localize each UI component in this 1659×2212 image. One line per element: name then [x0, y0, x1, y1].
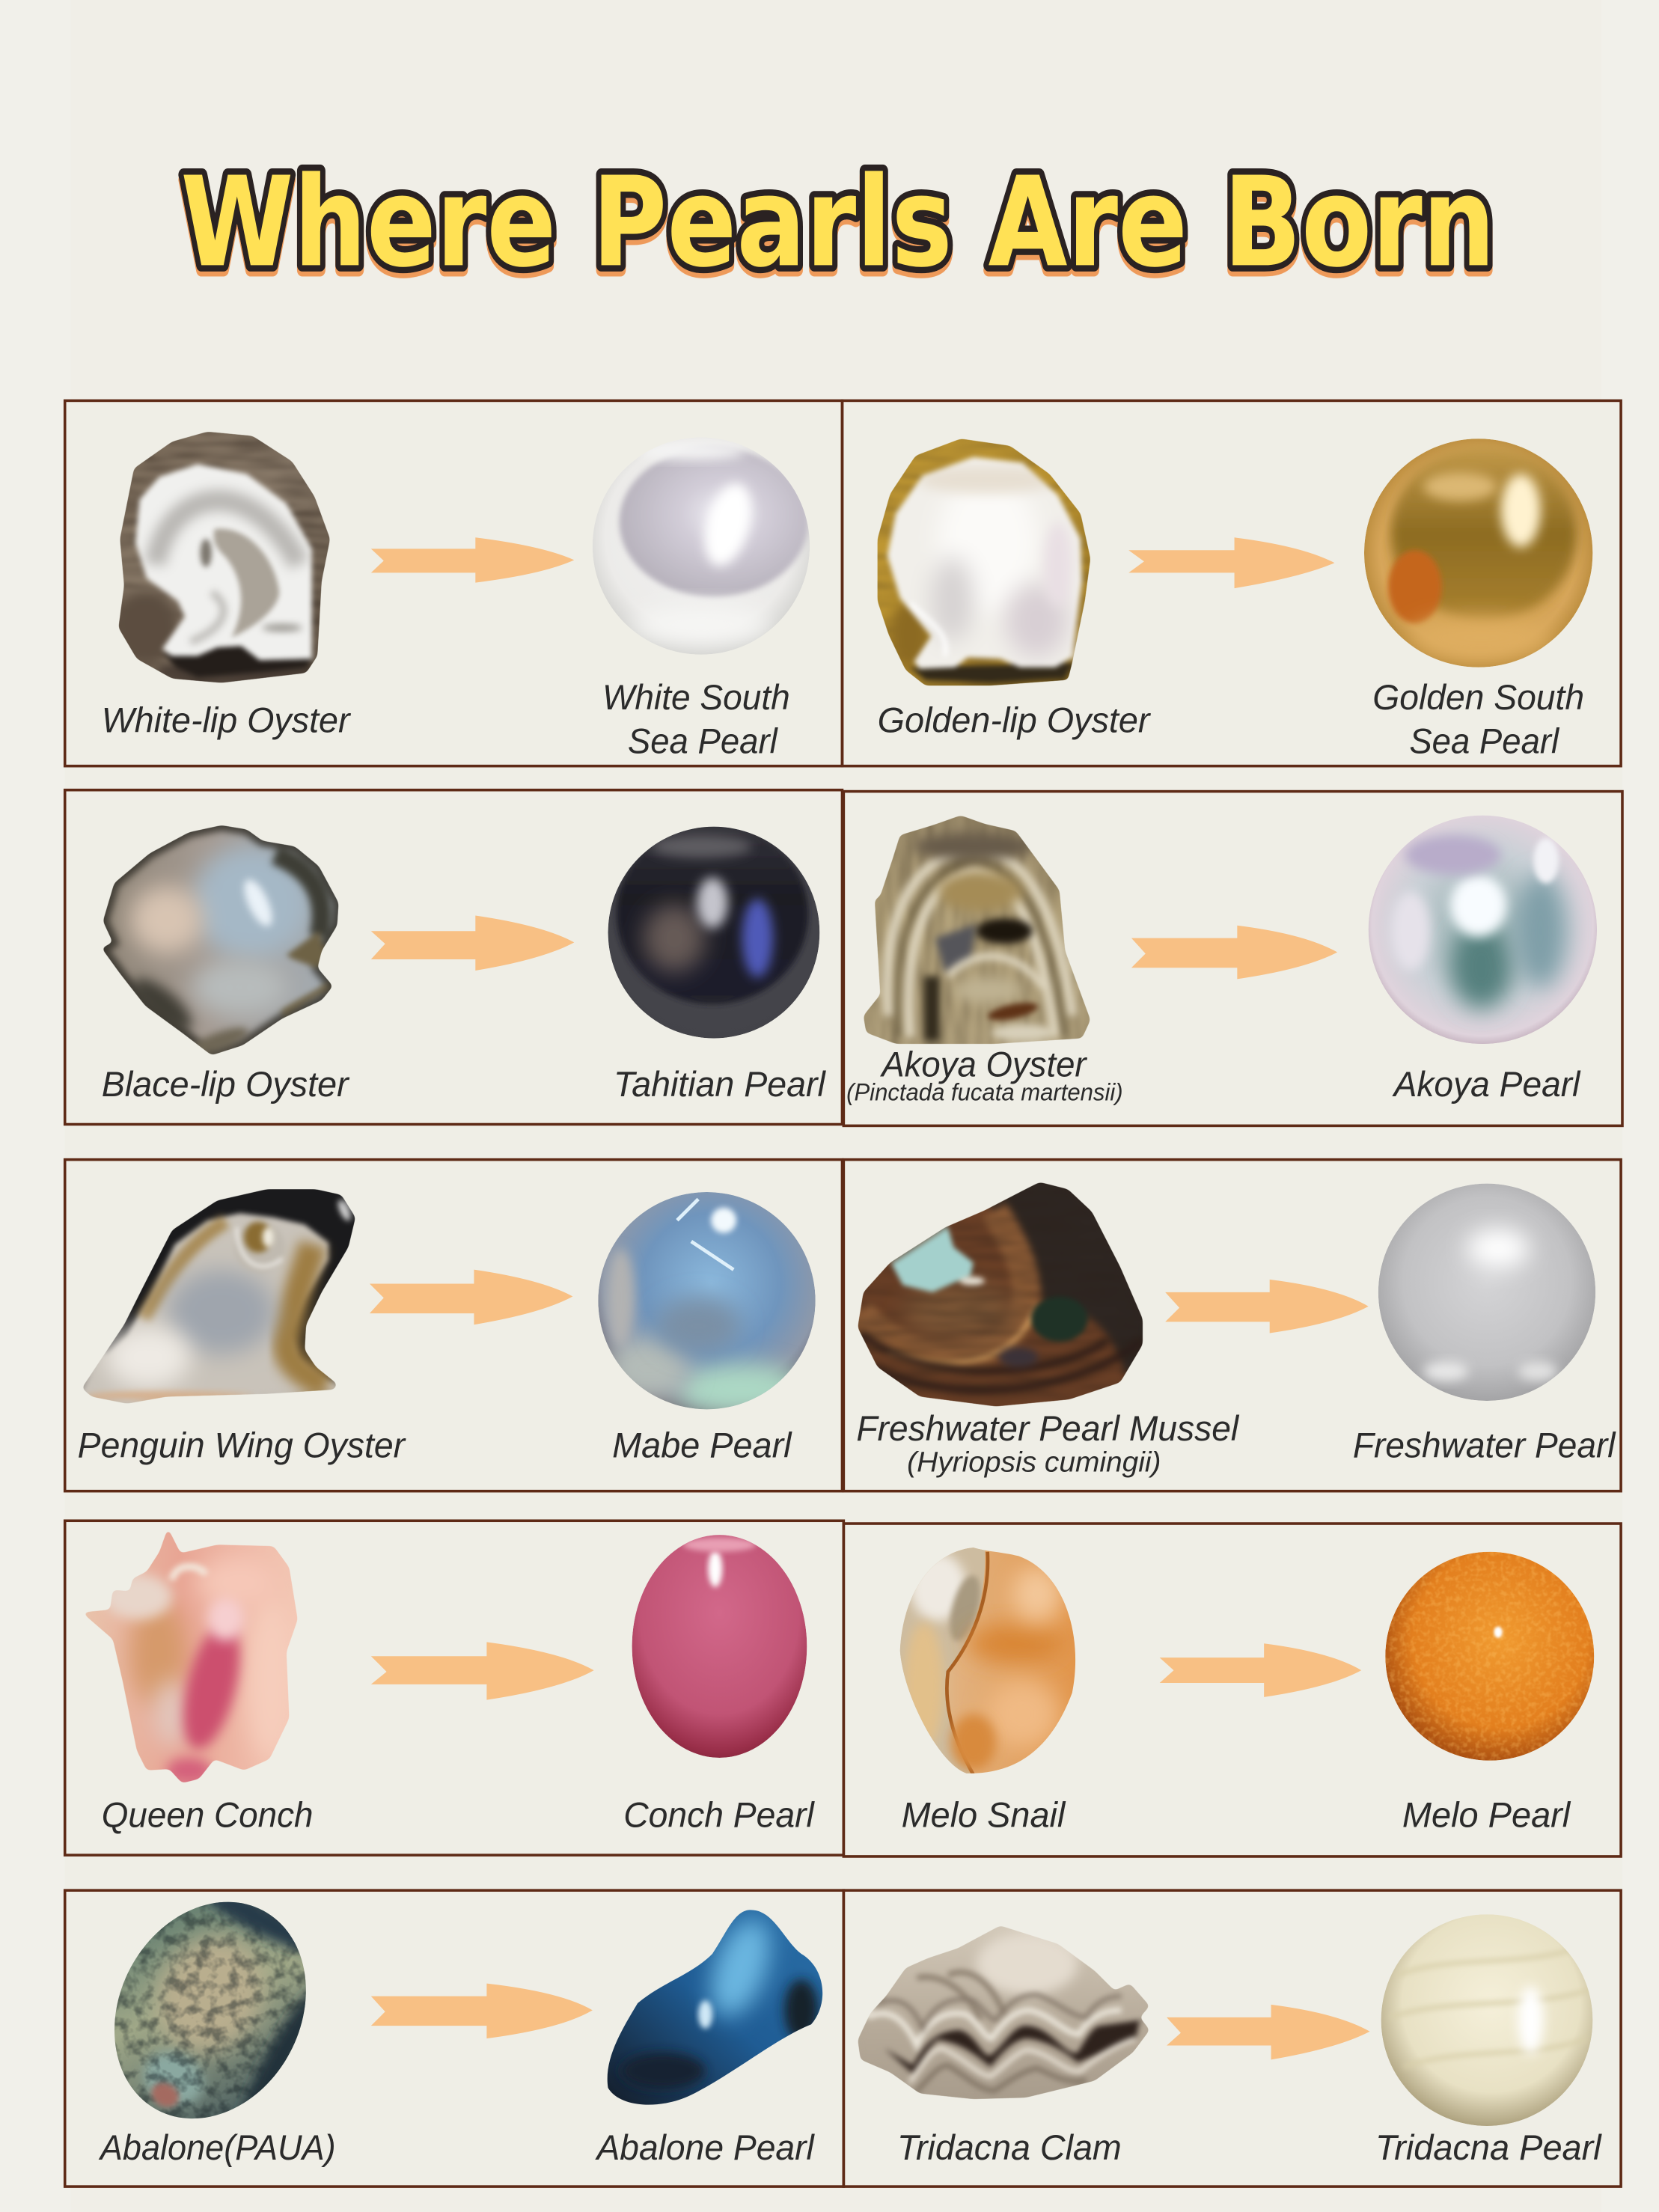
panel border — [843, 792, 1622, 1125]
arrow — [1165, 1280, 1369, 1333]
label: golden south sea pearl line two: Sea Pearl — [1409, 721, 1560, 761]
panel border — [65, 400, 842, 766]
label: conch pearl: Conch Pearl — [623, 1794, 815, 1834]
panel: freshwater pearl mussel — [843, 1157, 1621, 1491]
panel: golden-lip oyster — [842, 400, 1621, 766]
label: tahitian pearl: Tahitian Pearl — [614, 1064, 826, 1104]
label: white-lip oyster: White-lip Oyster — [102, 700, 352, 739]
label: akoya oyster: Akoya Oyster — [879, 1044, 1088, 1084]
panel: akoya oyster — [843, 792, 1622, 1125]
label: white south sea pearl line two: Sea Pearl — [628, 721, 778, 761]
label: tridacna pearl: Tridacna Pearl — [1375, 2127, 1602, 2167]
label: akoya pearl: Akoya Pearl — [1392, 1064, 1581, 1104]
icon: black-lip oyster shell — [102, 825, 338, 1060]
icon: melo snail shell — [889, 1545, 1075, 1780]
panel: penguin wing oyster — [65, 1160, 842, 1491]
icon: golden south sea pearl — [1364, 439, 1592, 667]
arrow — [1131, 926, 1337, 979]
label: queen conch: Queen Conch — [102, 1794, 314, 1834]
icon: akoya pearl — [1369, 816, 1597, 1044]
icon: freshwater pearl mussel shell — [852, 1157, 1171, 1411]
label: golden south sea pearl: Golden South — [1372, 677, 1584, 717]
icon: akoya oyster shell — [861, 811, 1093, 1048]
label: abalone pearl: Abalone Pearl — [594, 2127, 815, 2167]
panel border — [65, 1160, 842, 1491]
label: freshwater pearl: Freshwater Pearl — [1353, 1425, 1616, 1464]
arrow — [370, 1270, 572, 1325]
icon: white-lip oyster shell — [118, 432, 330, 682]
icon: penguin wing oyster shell — [78, 1189, 355, 1408]
panel border — [842, 400, 1621, 766]
icon: queen conch shell — [82, 1528, 298, 1783]
label: mabe pearl: Mabe Pearl — [612, 1425, 792, 1464]
arrow — [371, 915, 574, 971]
label: hyriopsis latin name: (Hyriopsis cumingii) — [907, 1446, 1161, 1477]
panel: abalone — [65, 1858, 843, 2187]
label: akoya latin name: (Pinctada fucata martensii) — [846, 1078, 1123, 1105]
panel: melo snail — [843, 1524, 1621, 1857]
panel: white-lip oyster — [65, 400, 842, 766]
icon: abalone shell — [67, 1858, 354, 2163]
arrow — [1160, 1643, 1361, 1697]
icon: mabe pearl — [598, 1192, 816, 1415]
arrow — [1128, 537, 1334, 588]
icon: freshwater pearl — [1378, 1184, 1595, 1401]
icon: melo pearl — [1385, 1552, 1594, 1761]
panel border — [843, 1890, 1621, 2187]
icon: abalone pearl — [608, 1910, 822, 2105]
label: abalone: Abalone(PAUA) — [98, 2127, 336, 2167]
panel border — [65, 1521, 843, 1855]
label: freshwater pearl mussel: Freshwater Pearl Mussel — [856, 1408, 1240, 1448]
panel border — [843, 1524, 1621, 1857]
icon: white south sea pearl — [593, 437, 810, 655]
label: melo pearl: Melo Pearl — [1402, 1794, 1571, 1834]
icon: tridacna pearl — [1381, 1914, 1592, 2126]
arrow — [371, 1984, 593, 2038]
arrow — [371, 537, 574, 583]
arrow — [371, 1642, 594, 1700]
arrow — [1167, 2005, 1370, 2059]
label: penguin wing oyster: Penguin Wing Oyster — [78, 1425, 406, 1464]
icon: conch pearl — [632, 1535, 807, 1758]
label: black-lip oyster: Blace-lip Oyster — [102, 1064, 350, 1104]
icon: tahitian pearl — [608, 824, 819, 1039]
icon: golden-lip oyster shell — [877, 439, 1090, 685]
icon: tridacna clam shell — [858, 1925, 1149, 2099]
label: golden-lip oyster: Golden-lip Oyster — [878, 700, 1152, 739]
panel border — [843, 1160, 1621, 1491]
label: white south sea pearl: White South — [602, 677, 790, 717]
panel border — [65, 1890, 843, 2187]
panel: queen conch — [65, 1521, 843, 1855]
label: tridacna clam: Tridacna Clam — [897, 2127, 1122, 2167]
panel: tridacna clam — [843, 1890, 1621, 2187]
label: melo snail: Melo Snail — [902, 1794, 1066, 1834]
panel border — [65, 790, 842, 1125]
panel: black-lip oyster — [65, 790, 842, 1125]
